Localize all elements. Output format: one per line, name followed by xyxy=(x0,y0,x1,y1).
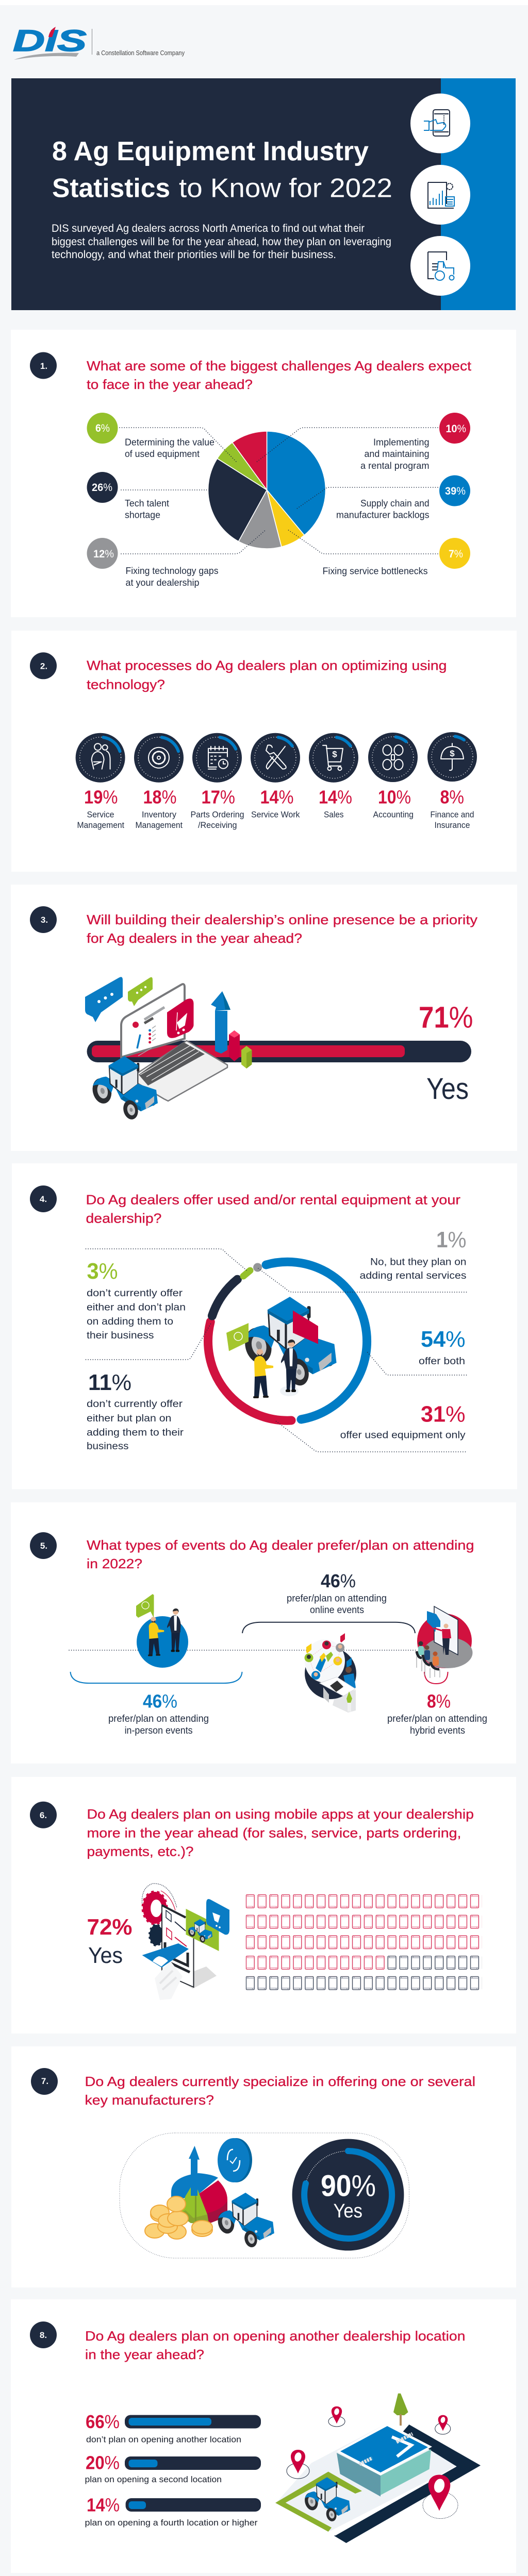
leader lines xyxy=(86,1249,466,1452)
bracket: online xyxy=(242,1622,415,1633)
stat: 3%: their business xyxy=(87,1330,154,1341)
metric: service management 19%: Management xyxy=(77,821,124,830)
badge 1 xyxy=(30,352,57,379)
callout: 39%: manufacturer backlogs xyxy=(336,510,429,520)
stat: 46% in-person xyxy=(108,1690,209,1736)
callout: 12%: at your dealership xyxy=(126,578,199,588)
heading 6 xyxy=(87,1806,474,1859)
heading 4: dealership? xyxy=(86,1211,162,1226)
callout: 26%: shortage xyxy=(125,510,160,520)
title: to Know for 2022 xyxy=(179,173,392,203)
metric: finance and insurance 8%: $ xyxy=(450,749,455,758)
bar: 20%: plan on opening a second location xyxy=(85,2475,222,2484)
stat: 11%: either but plan on xyxy=(87,1413,171,1424)
metric: finance and insurance 8% xyxy=(427,732,477,830)
leader line xyxy=(69,1650,418,1651)
stat: 71% yes xyxy=(419,1001,473,1106)
donut: 90% yes: 90% xyxy=(321,2170,376,2203)
stat: 31%: 31% xyxy=(421,1402,465,1427)
stat: 71% yes: 71% xyxy=(419,1001,473,1035)
callout: 10%: Implementing xyxy=(373,437,429,447)
heading 2 xyxy=(87,658,447,692)
heading 6: payments, etc.)? xyxy=(87,1844,194,1859)
panel: hero xyxy=(11,78,516,310)
callout: 39% xyxy=(336,475,470,520)
illustration: new dealership location xyxy=(275,2394,481,2543)
badge 8 xyxy=(30,2321,57,2348)
panel: question 4 xyxy=(12,1163,517,1489)
icon: document with tractor xyxy=(410,236,470,296)
panel: question 1 xyxy=(11,330,516,617)
metric: service work 14%: Service Work xyxy=(251,810,300,820)
heading 1 xyxy=(87,358,472,392)
bar: 14%: 14% xyxy=(87,2495,120,2516)
stat: 1% xyxy=(360,1227,466,1281)
metric: accounting 10%: Accounting xyxy=(373,810,414,820)
stat: 72% yes xyxy=(87,1914,132,1968)
panel: question 2 xyxy=(11,631,517,872)
callout: 7% xyxy=(323,538,470,576)
title: 8 Ag Equipment Industry xyxy=(52,137,369,166)
metric: sales 14%: 14% xyxy=(319,786,352,807)
callout: 7%: Fixing service bottlenecks xyxy=(323,566,428,576)
callout: 12%: Fixing technology gaps xyxy=(126,566,219,576)
metric: finance and insurance 8%: Finance and xyxy=(430,810,474,820)
illustration: laptop and tractor xyxy=(85,977,252,1121)
illustration: mobile apps xyxy=(142,1884,229,2000)
bracket: hybrid xyxy=(424,1672,448,1684)
illustration: pie, coins and tractor xyxy=(145,2138,274,2249)
badge 4 xyxy=(30,1185,57,1212)
heading 8: in the year ahead? xyxy=(85,2347,204,2362)
heading 5 xyxy=(87,1537,474,1571)
stat: 72% yes: Yes xyxy=(88,1943,123,1968)
stat: 8% hybrid: 8% xyxy=(427,1690,451,1711)
stat: 1%: adding rental services xyxy=(360,1270,466,1281)
callout: 26% xyxy=(87,472,169,520)
panel: question 7 xyxy=(11,2046,516,2287)
callout: 10%: 10% xyxy=(446,423,466,435)
callout: 6% xyxy=(87,413,214,459)
metric: sales 14%: $ xyxy=(332,750,337,759)
heading 8: Do Ag dealers plan on opening another dealership location xyxy=(85,2328,465,2344)
illustration: tractor and dealers xyxy=(226,1297,337,1398)
bar: 20% xyxy=(85,2452,261,2484)
stat: 46% online xyxy=(287,1570,387,1616)
intro paragraph: biggest challenges will be for the year ahead, how they plan on leveraging xyxy=(52,236,391,248)
bar: 14%: plan on opening a fourth location or higher xyxy=(85,2518,258,2528)
heading 5: What types of events do Ag dealer prefer/plan on attending xyxy=(87,1537,474,1553)
callout: 12%: 12% xyxy=(93,548,114,560)
donut: 90% yes xyxy=(292,2139,404,2250)
bar: 20%: 20% xyxy=(86,2452,120,2473)
stat: 8% hybrid: hybrid events xyxy=(410,1725,465,1736)
leader lines xyxy=(120,428,438,554)
stat: 46% in-person: in-person events xyxy=(125,1725,193,1736)
metric: service work 14% xyxy=(251,733,300,820)
stat: 3%: 3% xyxy=(87,1259,118,1284)
ring chart xyxy=(208,1262,367,1420)
metric: inventory management 18%: Inventory xyxy=(142,810,177,820)
illustration: hybrid event xyxy=(417,1606,472,1678)
callout: 10% xyxy=(360,413,470,471)
progress bar 71% xyxy=(87,1041,471,1062)
stat: 54%: offer both xyxy=(419,1356,465,1367)
heading 1: What are some of the biggest challenges Ag dealers expect xyxy=(87,358,472,374)
stat: 31% xyxy=(340,1402,466,1441)
callout: 6%: of used equipment xyxy=(125,449,200,459)
stat: 3%: don’t currently offer xyxy=(87,1288,183,1299)
callout: 26%: 26% xyxy=(92,482,112,494)
stat: 72% yes: 72% xyxy=(87,1914,132,1940)
metric: finance and insurance 8%: 8% xyxy=(440,786,464,807)
badge 2 xyxy=(30,652,57,679)
heading 7 xyxy=(85,2074,475,2108)
metric: parts ordering 17%: Parts Ordering xyxy=(191,810,244,820)
heading 4: Do Ag dealers offer used and/or rental equipment at your xyxy=(86,1192,460,1208)
callout: 6%: Determining the value xyxy=(125,437,214,447)
stat: 46% online: online events xyxy=(310,1605,364,1616)
title xyxy=(52,137,392,203)
heading 6: more in the year ahead (for sales, service, parts ordering, xyxy=(87,1825,461,1841)
stat: 46% in-person: 46% xyxy=(143,1690,177,1711)
badge 3 xyxy=(30,906,57,933)
stat: 11% xyxy=(87,1370,184,1452)
metric: inventory management 18%: 18% xyxy=(143,786,176,807)
metric: finance and insurance 8%: Insurance xyxy=(434,821,470,830)
stat: 8% hybrid xyxy=(387,1690,487,1736)
stat: 46% online: 46% xyxy=(321,1570,356,1591)
heading 8 xyxy=(85,2328,465,2362)
heading 3 xyxy=(87,912,477,946)
heading 2: What processes do Ag dealers plan on optimizing using xyxy=(87,658,447,673)
stat: 71% yes: Yes xyxy=(426,1072,469,1106)
dotted frame xyxy=(120,2133,409,2258)
metric: service management 19%: 19% xyxy=(84,786,118,807)
metric: sales 14% xyxy=(309,733,358,820)
callout: 39%: 39% xyxy=(445,485,466,497)
intro paragraph: DIS surveyed Ag dealers across North America to find out what their xyxy=(52,223,365,234)
stat: 3% xyxy=(87,1259,186,1341)
callout: 26%: Tech talent xyxy=(125,498,169,509)
logo: DIS: a Constellation Software Company xyxy=(96,49,185,57)
stat: 46% in-person: prefer/plan on attending xyxy=(108,1714,209,1724)
heading 3: for Ag dealers in the year ahead? xyxy=(87,930,302,946)
metric: accounting 10%: 10% xyxy=(378,786,411,807)
stat: 1%: No, but they plan on xyxy=(370,1257,466,1267)
intro paragraph xyxy=(52,223,391,261)
badge 8: 8. xyxy=(40,2330,47,2340)
illustration: online event xyxy=(304,1633,356,1713)
stat: 11%: business xyxy=(87,1441,129,1452)
badge 5: 5. xyxy=(40,1541,47,1551)
badge 6: 6. xyxy=(40,1810,47,1820)
callout: 7%: 7% xyxy=(449,548,463,560)
callout: 6%: 6% xyxy=(95,422,110,434)
badge 5 xyxy=(30,1532,57,1559)
metric: parts ordering 17% xyxy=(191,733,244,830)
bar: 66% xyxy=(86,2411,261,2445)
pie chart xyxy=(208,431,325,549)
badge 2: 2. xyxy=(40,662,47,671)
heading 1: to face in the year ahead? xyxy=(87,377,253,392)
badge 7 xyxy=(31,2068,58,2095)
donut: 90% yes: Yes xyxy=(333,2200,362,2222)
intro paragraph: technology, and what their priorities will be for their business. xyxy=(52,249,336,261)
badge 7: 7. xyxy=(41,2076,48,2086)
metric: inventory management 18% xyxy=(134,733,184,830)
metric: service management 19% xyxy=(76,733,125,830)
stat: 11%: adding them to their xyxy=(87,1427,184,1438)
icon: phone with hand xyxy=(410,94,470,154)
metric: parts ordering 17%: /Receiving xyxy=(198,821,237,830)
illustration: in-person event xyxy=(136,1594,188,1668)
bracket: in-person xyxy=(70,1672,242,1683)
top white strip xyxy=(0,0,528,5)
heading 7: Do Ag dealers currently specialize in offering one or several xyxy=(85,2074,475,2089)
heading 6: Do Ag dealers plan on using mobile apps at your dealership xyxy=(87,1806,474,1822)
bar: 66%: don’t plan on opening another location xyxy=(86,2435,241,2445)
bar: 14% xyxy=(85,2495,261,2528)
metric: inventory management 18%: Management xyxy=(135,821,183,830)
callout: 12% xyxy=(87,538,219,588)
badge 1: 1. xyxy=(40,361,47,371)
icon: document with chart xyxy=(410,165,470,225)
stat: 8% hybrid: prefer/plan on attending xyxy=(387,1714,487,1724)
badge 3: 3. xyxy=(41,915,48,925)
stat: 11%: 11% xyxy=(88,1370,131,1395)
title: Statistics xyxy=(52,173,170,203)
metric: service work 14%: 14% xyxy=(260,786,294,807)
stat: 31%: offer used equipment only xyxy=(340,1430,466,1441)
phone pictogram grid: 72 of 100 xyxy=(246,1894,482,1997)
stat: 3%: either and don’t plan xyxy=(87,1302,186,1313)
callout: 10%: and maintaining xyxy=(364,449,429,459)
heading 2: technology? xyxy=(87,676,165,692)
metric: parts ordering 17%: 17% xyxy=(201,786,235,807)
badge 4: 4. xyxy=(40,1194,47,1204)
heading 4 xyxy=(86,1192,460,1226)
panel: question 6 xyxy=(11,1777,516,2033)
metric: sales 14%: Sales xyxy=(324,810,343,820)
logo: DIS xyxy=(13,24,185,60)
panel: question 3 xyxy=(11,885,517,1151)
heading 7: key manufacturers? xyxy=(85,2092,214,2108)
metric: accounting 10% xyxy=(368,733,418,820)
metric: service management 19%: Service xyxy=(87,810,114,820)
stat: 11%: don’t currently offer xyxy=(87,1399,183,1410)
heading 5: in 2022? xyxy=(87,1556,142,1571)
stat: 1%: 1% xyxy=(436,1227,466,1252)
stat: 54% xyxy=(419,1327,465,1367)
stat: 54%: 54% xyxy=(421,1327,465,1352)
heading 3: Will building their dealership’s online presence be a priority xyxy=(87,912,477,927)
callout: 39%: Supply chain and xyxy=(360,498,429,509)
stat: 46% online: prefer/plan on attending xyxy=(287,1594,387,1604)
callout: 10%: a rental program xyxy=(360,461,429,471)
panel: question 5 xyxy=(11,1502,516,1764)
panel: question 8 xyxy=(11,2299,516,2573)
logo: DIS: DIS xyxy=(13,24,87,58)
bar: 66%: 66% xyxy=(86,2411,120,2432)
stat: 3%: on adding them to xyxy=(87,1316,173,1327)
badge 6 xyxy=(30,1802,57,1828)
